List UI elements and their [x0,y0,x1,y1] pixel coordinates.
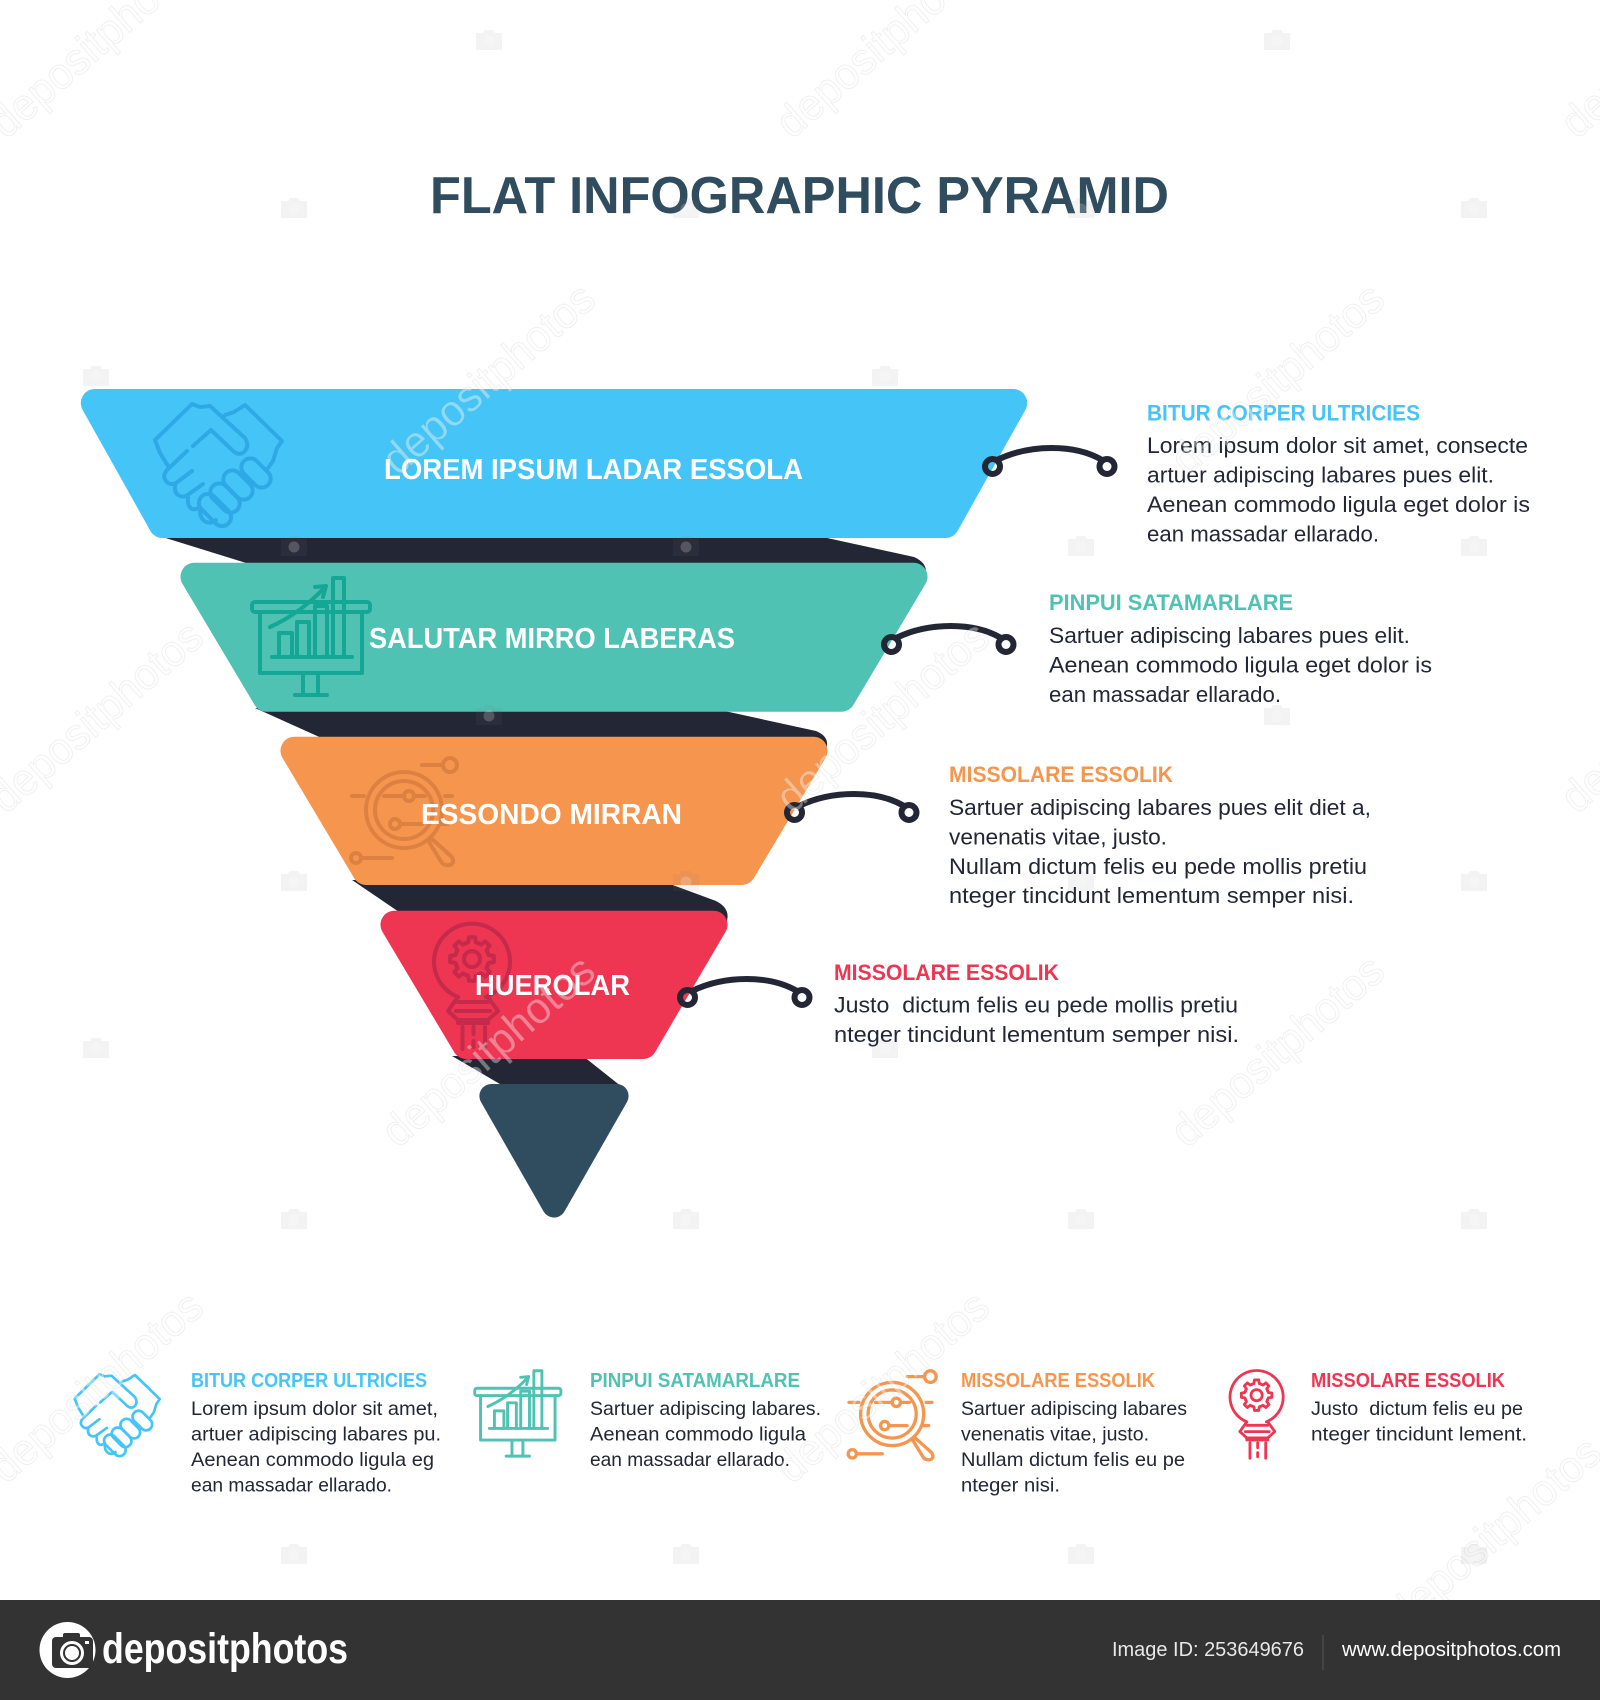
legend icon: magnifier [848,1371,936,1460]
watermark: depositphotos text pattern: depositphotos [1161,946,1394,1156]
text block: bitur corper ultricies: ean massadar ellarado. [1147,522,1379,546]
text block: bitur corper ultricies [1147,400,1530,546]
legend text: pinpui satamarlare: ean massadar ellarado. [590,1449,790,1471]
legend text: missolare essolik red: nteger tincidunt lement. [1311,1424,1527,1446]
icon: magnifier on orange band [351,758,457,865]
legend text: missolare essolik red: Justo dictum felis eu pe [1311,1398,1523,1420]
footer website url: www.depositphotos.com [1341,1639,1561,1661]
legend icon: handshake [75,1374,160,1459]
text block: missolare essolik orange: Nullam dictum felis eu pede mollis pretiu [949,854,1367,879]
funnel band: orange [294,751,814,871]
legend text: pinpui satamarlare: PINPUI SATAMARLARE [590,1370,800,1392]
icon: handshake on blue band [155,404,282,530]
text block: pinpui satamarlare: Sartuer adipiscing labares pues elit. [1049,623,1410,648]
legend text: bitur corper ultricies [191,1370,441,1496]
legend text: missolare essolik orange: Sartuer adipiscing labares [961,1398,1187,1420]
text block: bitur corper ultricies: Lorem ipsum dolor sit amet, consecte [1147,433,1528,458]
footer logo text: depositphotos [102,1625,348,1673]
watermark: depositphotos text pattern: depositphotos [766,612,999,822]
legend text: missolare essolik orange: venenatis vitae, justo. [961,1424,1149,1446]
text block: missolare essolik red: nteger tincidunt lementum semper nisi. [834,1022,1239,1047]
watermark: depositphotos text pattern: depositphotos [372,274,605,484]
legend text: missolare essolik orange: nteger nisi. [961,1474,1060,1496]
text block: missolare essolik red: MISSOLARE ESSOLIK [834,960,1059,985]
text block: missolare essolik orange [949,762,1371,908]
legend text: missolare essolik red: MISSOLARE ESSOLIK [1311,1370,1506,1392]
legend text: missolare essolik orange: MISSOLARE ESSOLIK [961,1370,1156,1392]
funnel band: blue [95,403,1013,524]
legend text: bitur corper ultricies: ean massadar ellarado. [191,1474,392,1496]
icon: chart board on teal band [252,578,370,695]
footer bar [0,1600,1600,1700]
legend icon: bulb [1230,1370,1283,1458]
text block: missolare essolik orange: nteger tincidunt lementum semper nisi. [949,883,1354,908]
text block: bitur corper ultricies: BITUR CORPER ULTRICIES [1147,400,1420,426]
watermark: depositphotos text pattern: depositphotos [766,1282,999,1492]
text block: pinpui satamarlare [1049,590,1432,707]
watermark: depositphotos text pattern: depositphotos [1161,274,1394,484]
legend text: missolare essolik orange [961,1370,1187,1496]
text block: pinpui satamarlare: PINPUI SATAMARLARE [1049,590,1293,615]
legend icon: chart board [475,1371,561,1456]
text block: pinpui satamarlare: ean massadar ellarado. [1049,682,1281,707]
watermark: depositphotos text pattern: depositphotos [372,946,605,1156]
text block: missolare essolik red: Justo dictum felis eu pede mollis pretiu [834,992,1238,1018]
connector: teal [884,626,1014,652]
band label: blue: LOREM IPSUM LADAR ESSOLA [384,454,803,486]
legend text: bitur corper ultricies: Lorem ipsum dolor sit amet, [191,1398,438,1420]
connector: blue [985,448,1114,474]
legend text: pinpui satamarlare: Sartuer adipiscing labares. [590,1398,821,1420]
text block: missolare essolik orange: Sartuer adipiscing labares pues elit diet a, [949,795,1371,820]
legend text: pinpui satamarlare [590,1370,821,1471]
text block: bitur corper ultricies: Aenean commodo ligula eget dolor is [1147,492,1530,517]
icon: bulb on red band [434,924,510,1049]
legend text: missolare essolik red [1311,1370,1527,1446]
text block: missolare essolik red [834,960,1239,1047]
text block: missolare essolik orange: MISSOLARE ESSOLIK [949,762,1173,787]
connector: red [680,979,810,1005]
text block: pinpui satamarlare: Aenean commodo ligula eget dolor is [1049,652,1432,678]
band label: orange: ESSONDO MIRRAN [421,799,682,831]
title: FLAT INFOGRAPHIC PYRAMID [430,167,1169,225]
text block: missolare essolik orange: venenatis vitae, justo. [949,824,1167,850]
funnel shadow: dark connectors [156,535,926,1087]
legend text: bitur corper ultricies: artuer adipiscing labares pu. [191,1424,441,1446]
band label: teal: SALUTAR MIRRO LABERAS [369,623,735,655]
legend text: missolare essolik orange: Nullam dictum felis eu pe [961,1449,1185,1471]
footer image id: Image ID: 253649676 [1112,1639,1304,1661]
footer logo icon: camera [40,1622,96,1678]
watermark: camera icons [83,30,1487,1564]
text block: bitur corper ultricies: artuer adipiscing labares pues elit. [1147,462,1494,488]
funnel band: red [394,925,714,1045]
connector: orange [787,794,916,820]
legend text: bitur corper ultricies: Aenean commodo ligula eg [191,1449,434,1471]
legend text: bitur corper ultricies: BITUR CORPER ULTRICIES [191,1370,427,1392]
legend text: pinpui satamarlare: Aenean commodo ligula [590,1424,806,1446]
funnel tip: dark triangle [491,1096,617,1206]
band label: red: HUEROLAR [475,970,630,1002]
funnel band: teal [194,577,914,698]
